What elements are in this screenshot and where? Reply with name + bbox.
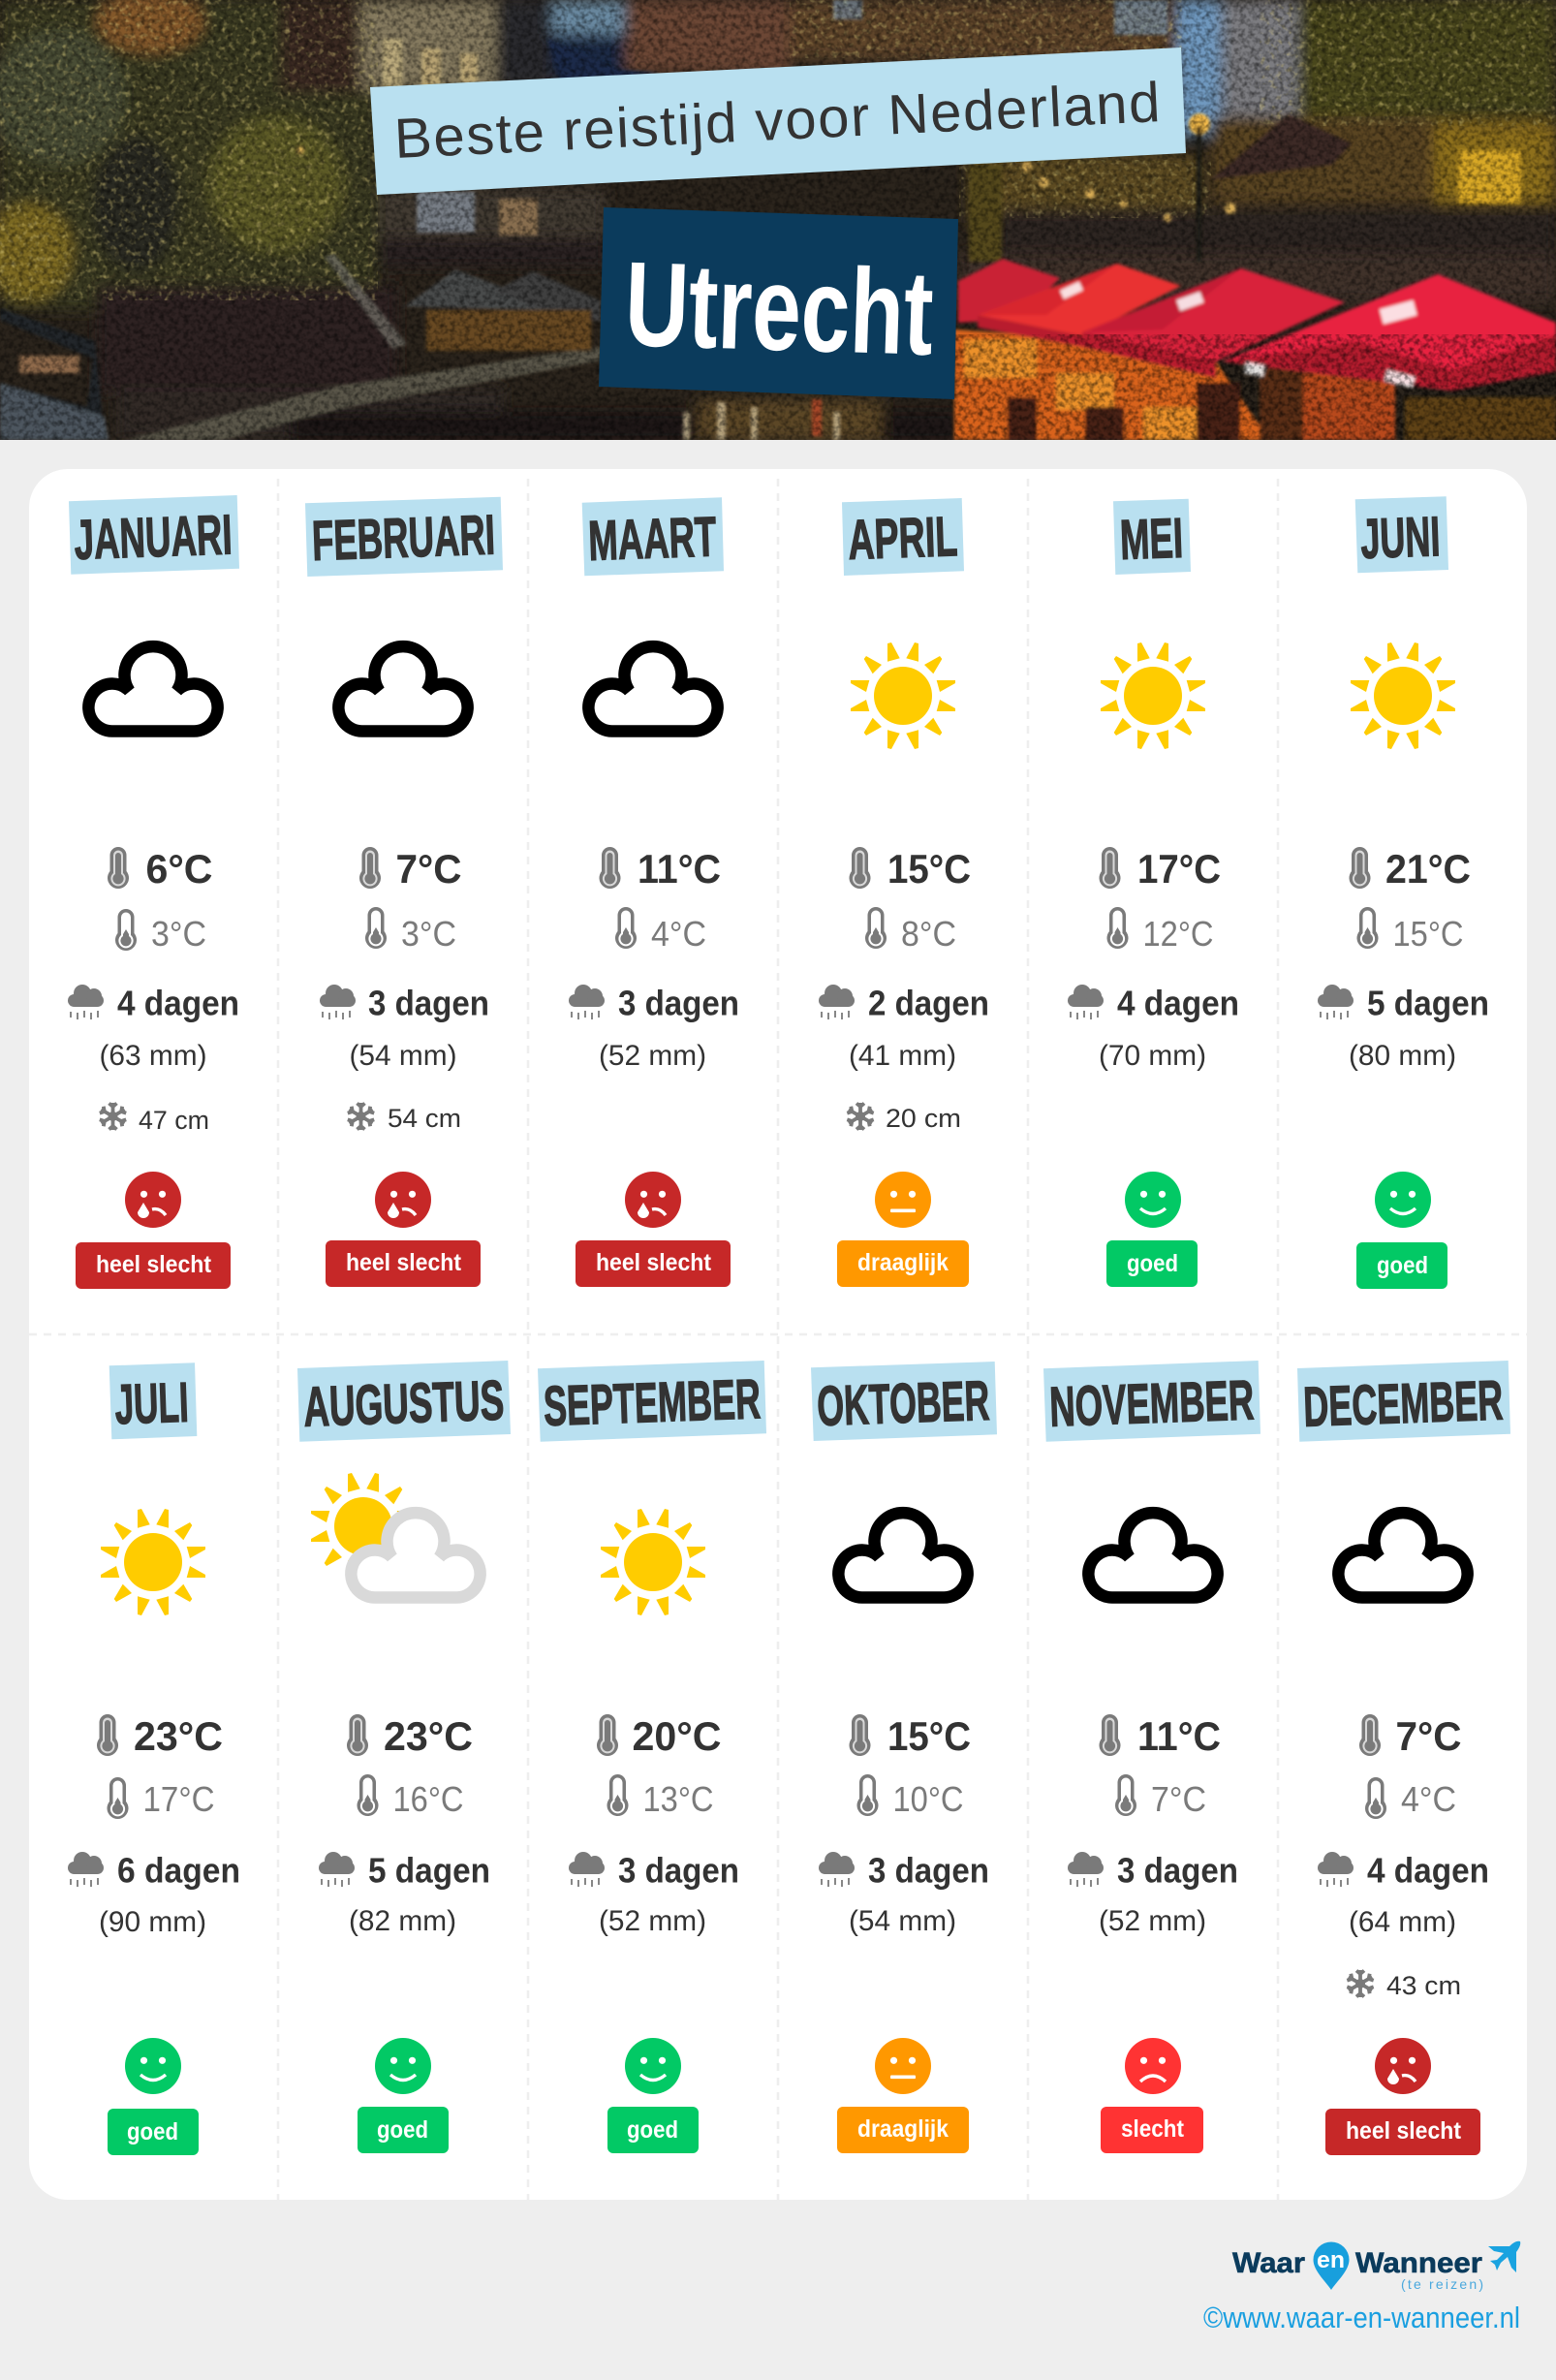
high temperature [1099,1713,1221,1759]
low temperature [615,907,706,954]
low temperature: 7°C [1151,1779,1206,1819]
snow: 43 cm [1386,1971,1461,2000]
rain days: 4 dagen [1117,983,1239,1023]
rating smiley [1125,2038,1181,2094]
panel: januari [68,495,239,1289]
rain days [320,983,489,1023]
month label [811,1362,997,1441]
rating badge [358,2107,449,2153]
month label [1043,1361,1260,1442]
rating badge: heel slecht [346,1249,462,1276]
rain days [819,983,989,1023]
low temperature: 16°C [393,1779,463,1819]
high temperature [1349,846,1471,892]
rainfall: (41 mm) [849,1040,956,1072]
rating smiley [625,1172,681,1228]
icon: cloud [88,646,218,732]
rating badge [837,2107,969,2153]
rating badge [326,1240,481,1287]
low temperature: 13°C [643,1779,713,1819]
icon: cloud [338,646,468,732]
rating badge: heel slecht [596,1249,712,1276]
panel: mei [1068,499,1239,1287]
month label: MEI [1119,507,1184,572]
rain days [1068,1851,1238,1890]
low temperature [365,907,456,954]
rain days: 3 dagen [1117,1851,1238,1890]
month label: APRIL [847,505,958,572]
rain days: 3 dagen [868,1851,989,1890]
rating smiley [375,1172,431,1228]
city name: Utrecht [623,237,935,381]
icon: sun [1351,642,1455,749]
panel: december [1297,1361,1510,2155]
orange crowd below umbrellas [954,329,1269,440]
rating badge [76,1242,231,1289]
rainfall: (64 mm) [1349,1906,1456,1938]
rating smiley [625,2038,681,2094]
rain days: 3 dagen [618,983,739,1023]
month label: SEPTEMBER [543,1367,762,1438]
month label [1355,496,1448,573]
snow [1347,1970,1461,2000]
rainfall: (90 mm) [99,1906,206,1938]
month label [305,497,503,577]
rain days [68,983,239,1023]
panel: juli [68,1362,240,2155]
high temperature: 7°C [395,846,461,892]
rating smiley [125,2038,181,2094]
logo: Waar en Wanneer: (te reizen) [1401,2276,1483,2292]
rating smiley [1375,2038,1431,2094]
rainfall: (80 mm) [1349,1040,1456,1072]
month label: JULI [113,1371,190,1436]
high temperature: 21°C [1385,846,1471,892]
rainfall: (52 mm) [599,1905,706,1937]
snow: 47 cm [139,1106,209,1135]
snow [847,1103,961,1133]
month label [582,497,724,576]
rating badge: goed [627,2116,678,2144]
rain days: 4 dagen [1367,1851,1489,1890]
icon: sun [601,1509,705,1615]
rain days: 3 dagen [368,983,489,1023]
month label: MAART [587,505,717,573]
panel: februari [305,497,503,1287]
panel: juni [1318,496,1489,1289]
month label [842,498,964,576]
high temperature: 20°C [632,1713,721,1759]
title banner [370,47,1186,195]
rating badge: slecht [1121,2115,1185,2143]
rating badge [1106,1240,1198,1287]
low temperature: 3°C [151,914,206,954]
rating badge: heel slecht [1346,2117,1462,2145]
low temperature: 4°C [651,914,706,954]
rainfall: (54 mm) [349,1040,457,1072]
month label [109,1362,197,1439]
high temperature: 7°C [1395,1713,1461,1759]
rain days [1318,983,1489,1023]
low temperature [357,1774,463,1819]
rain days: 5 dagen [368,1851,490,1890]
low temperature [1356,907,1463,954]
icon: sun [851,642,955,749]
low temperature [856,1774,963,1819]
rating badge [1356,1242,1447,1289]
month label: AUGUSTUS [302,1369,505,1439]
rating badge: goed [1127,1250,1178,1277]
snow: 20 cm [886,1104,961,1133]
rating badge: draaglijk [857,1249,949,1276]
low temperature [607,1774,713,1819]
title text: Beste reistijd voor Nederland [393,71,1162,171]
rain days [569,1851,739,1890]
snow [347,1103,461,1133]
high temperature [359,846,461,892]
high temperature [108,846,213,892]
rain days: 4 dagen [117,983,239,1023]
low temperature: 10°C [893,1779,963,1819]
high temperature: 17°C [1137,846,1221,892]
logo: Waar en Wanneer [1232,2241,1520,2292]
hero photo: Utrecht canal at night [0,0,1556,440]
panel: november [1043,1361,1260,2153]
rainfall: (54 mm) [849,1905,956,1937]
icon: cloud [588,646,718,732]
low temperature [1106,907,1213,954]
rainfall: (52 mm) [1099,1905,1206,1937]
rainfall: (63 mm) [99,1040,207,1072]
panel: september [538,1361,766,2153]
rain days [1318,1851,1489,1890]
high temperature [849,1713,971,1759]
rain days [68,1851,240,1890]
low temperature: 8°C [901,914,956,954]
rating badge [607,2107,699,2153]
low temperature: 17°C [143,1779,215,1819]
rating badge: heel slecht [96,1251,212,1278]
rain days [319,1851,490,1890]
high temperature: 11°C [1137,1713,1221,1759]
icon: cloud [1338,1513,1468,1598]
month label [297,1361,511,1442]
low temperature: 4°C [1401,1779,1456,1819]
month label: JUNI [1359,505,1441,571]
rain days: 2 dagen [868,983,989,1023]
high temperature [1359,1713,1461,1759]
high temperature: 15°C [887,846,971,892]
month label [1113,499,1191,575]
high temperature [1099,846,1221,892]
high temperature: 15°C [887,1713,971,1759]
rating badge: goed [127,2118,178,2145]
high temperature [849,846,971,892]
month label: JANUARI [73,503,233,572]
low temperature [115,909,206,954]
icon: partly cloudy [311,1473,481,1598]
icon: sun [101,1509,205,1615]
low temperature [865,907,956,954]
high temperature: 23°C [134,1713,223,1759]
low temperature [107,1777,215,1819]
low temperature: 3°C [401,914,456,954]
panel: maart [569,497,739,1287]
month label: OKTOBER [816,1369,990,1438]
month label: FEBRUARI [311,503,496,573]
rating badge [576,1240,731,1287]
rain days: 5 dagen [1367,983,1489,1023]
rainfall: (52 mm) [599,1040,706,1072]
rating smiley [1375,1172,1431,1228]
month label [538,1361,766,1442]
month label [69,495,239,575]
city banner [599,207,958,399]
panel: april [819,498,989,1287]
panel: oktober [811,1362,997,2153]
rating badge: goed [377,2116,428,2144]
high temperature: 6°C [145,846,213,892]
source url: ©www.waar-en-wanneer.nl [1203,2301,1520,2334]
high temperature: 23°C [384,1713,473,1759]
rainfall: (70 mm) [1099,1040,1206,1072]
high temperature [599,846,721,892]
rating smiley [1125,1172,1181,1228]
rain days: 3 dagen [618,1851,739,1890]
rain days [1068,983,1239,1023]
icon: cloud [838,1513,968,1598]
month label: NOVEMBER [1048,1368,1255,1439]
low temperature [1365,1777,1456,1819]
rating smiley [375,2038,431,2094]
rating smiley [875,1172,931,1228]
rain days [569,983,739,1023]
red umbrellas [958,259,1060,323]
white card panel [29,469,1527,2200]
icon: map pin [1314,2242,1349,2290]
rating badge [1325,2109,1480,2155]
rating smiley [875,2038,931,2094]
rating badge [1101,2107,1203,2153]
icon: plane [1488,2241,1520,2272]
low temperature: 15°C [1393,914,1463,954]
rating smiley [125,1172,181,1228]
rainfall: (82 mm) [349,1905,456,1937]
high temperature [97,1713,223,1759]
logo: Waar en Wanneer: Waar [1232,2247,1305,2279]
rating badge [837,1240,969,1287]
snow [99,1103,209,1135]
rain days [819,1851,989,1890]
low temperature [1115,1774,1206,1819]
rain days: 6 dagen [117,1851,240,1890]
panel: augustus [297,1361,511,2153]
rating badge: draaglijk [857,2115,949,2143]
high temperature: 11°C [638,846,721,892]
icon: cloud [1088,1513,1218,1598]
icon: map pin: en [1317,2247,1345,2273]
icon: sun [1101,642,1205,749]
rating badge [108,2109,199,2155]
logo: Waar en Wanneer: Wanneer [1355,2247,1482,2279]
high temperature [347,1713,473,1759]
low temperature: 12°C [1143,914,1213,954]
rating badge: goed [1377,1252,1428,1279]
snow: 54 cm [388,1104,461,1133]
